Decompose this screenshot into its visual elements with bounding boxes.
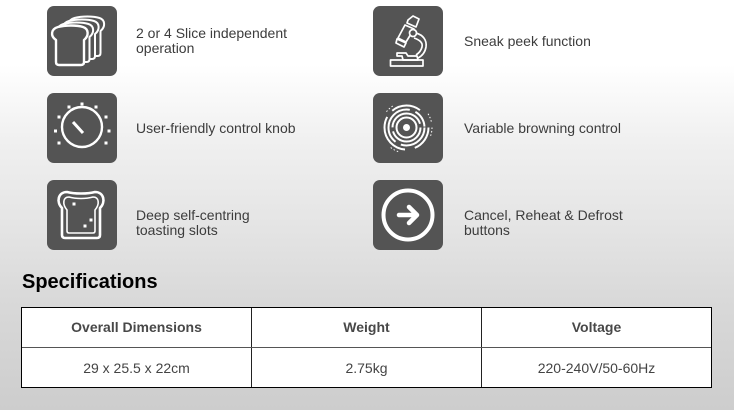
- feature icon: microscope: [373, 6, 443, 76]
- header: weight: Weight: [343, 319, 390, 335]
- feature text: Deep self-centring: [136, 207, 250, 223]
- feature icon: arrow button: [373, 180, 443, 250]
- feature text: Cancel, Reheat & Defrost: [464, 207, 623, 223]
- feature text: operation: [136, 40, 194, 56]
- feature text: [464, 207, 623, 238]
- specifications table: [21, 307, 712, 388]
- feature text: Variable browning control: [464, 120, 621, 136]
- feature icon: browning dial: [373, 93, 443, 163]
- feature icon: bread slices: [47, 6, 117, 76]
- feature text: 2 or 4 Slice independent: [136, 25, 287, 41]
- header: voltage: Voltage: [572, 319, 621, 335]
- header: overall dimensions: Overall Dimensions: [71, 319, 202, 335]
- feature text: [136, 207, 250, 238]
- feature icon: toast slot: [47, 180, 117, 250]
- feature text: [136, 25, 287, 56]
- heading: specifications: Specifications: [22, 271, 158, 293]
- feature text: toasting slots: [136, 222, 218, 238]
- value: voltage: 220-240V/50-60Hz: [538, 360, 655, 376]
- feature text: User-friendly control knob: [136, 120, 296, 136]
- feature text: buttons: [464, 222, 510, 238]
- feature icon: control knob: [47, 93, 117, 163]
- value: weight: 2.75kg: [345, 360, 388, 376]
- feature text: Sneak peek function: [464, 33, 591, 49]
- value: dimensions: 29 x 25.5 x 22cm: [83, 360, 190, 376]
